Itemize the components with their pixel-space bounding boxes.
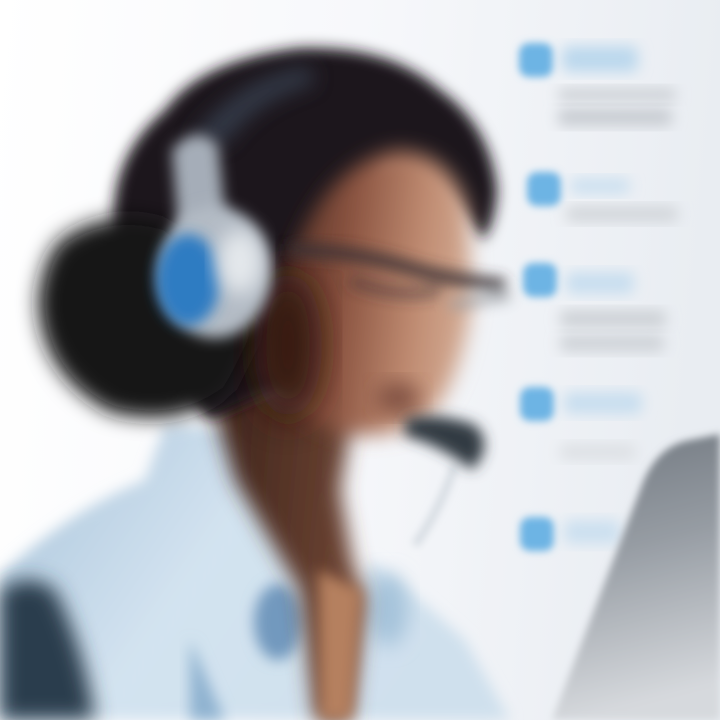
lips <box>376 382 420 414</box>
ear cup blue pad <box>156 234 220 326</box>
laptop <box>552 434 720 720</box>
ear cup <box>159 206 271 338</box>
list item 4 <box>520 387 642 460</box>
glasses <box>290 250 510 305</box>
microphone boom <box>415 465 455 545</box>
hair <box>38 48 497 420</box>
neck and chest <box>205 380 365 720</box>
headset <box>156 66 484 545</box>
headband <box>190 66 315 145</box>
shirt <box>0 425 510 720</box>
shaded cheek <box>254 271 322 419</box>
agent <box>0 48 510 720</box>
headband arm <box>172 135 228 250</box>
microphone <box>405 416 484 470</box>
list item 1 <box>519 43 676 126</box>
face <box>262 150 472 435</box>
list item 2 <box>527 172 678 222</box>
list item 5 <box>520 517 620 551</box>
service list <box>519 43 678 551</box>
list item 3 <box>523 263 666 352</box>
